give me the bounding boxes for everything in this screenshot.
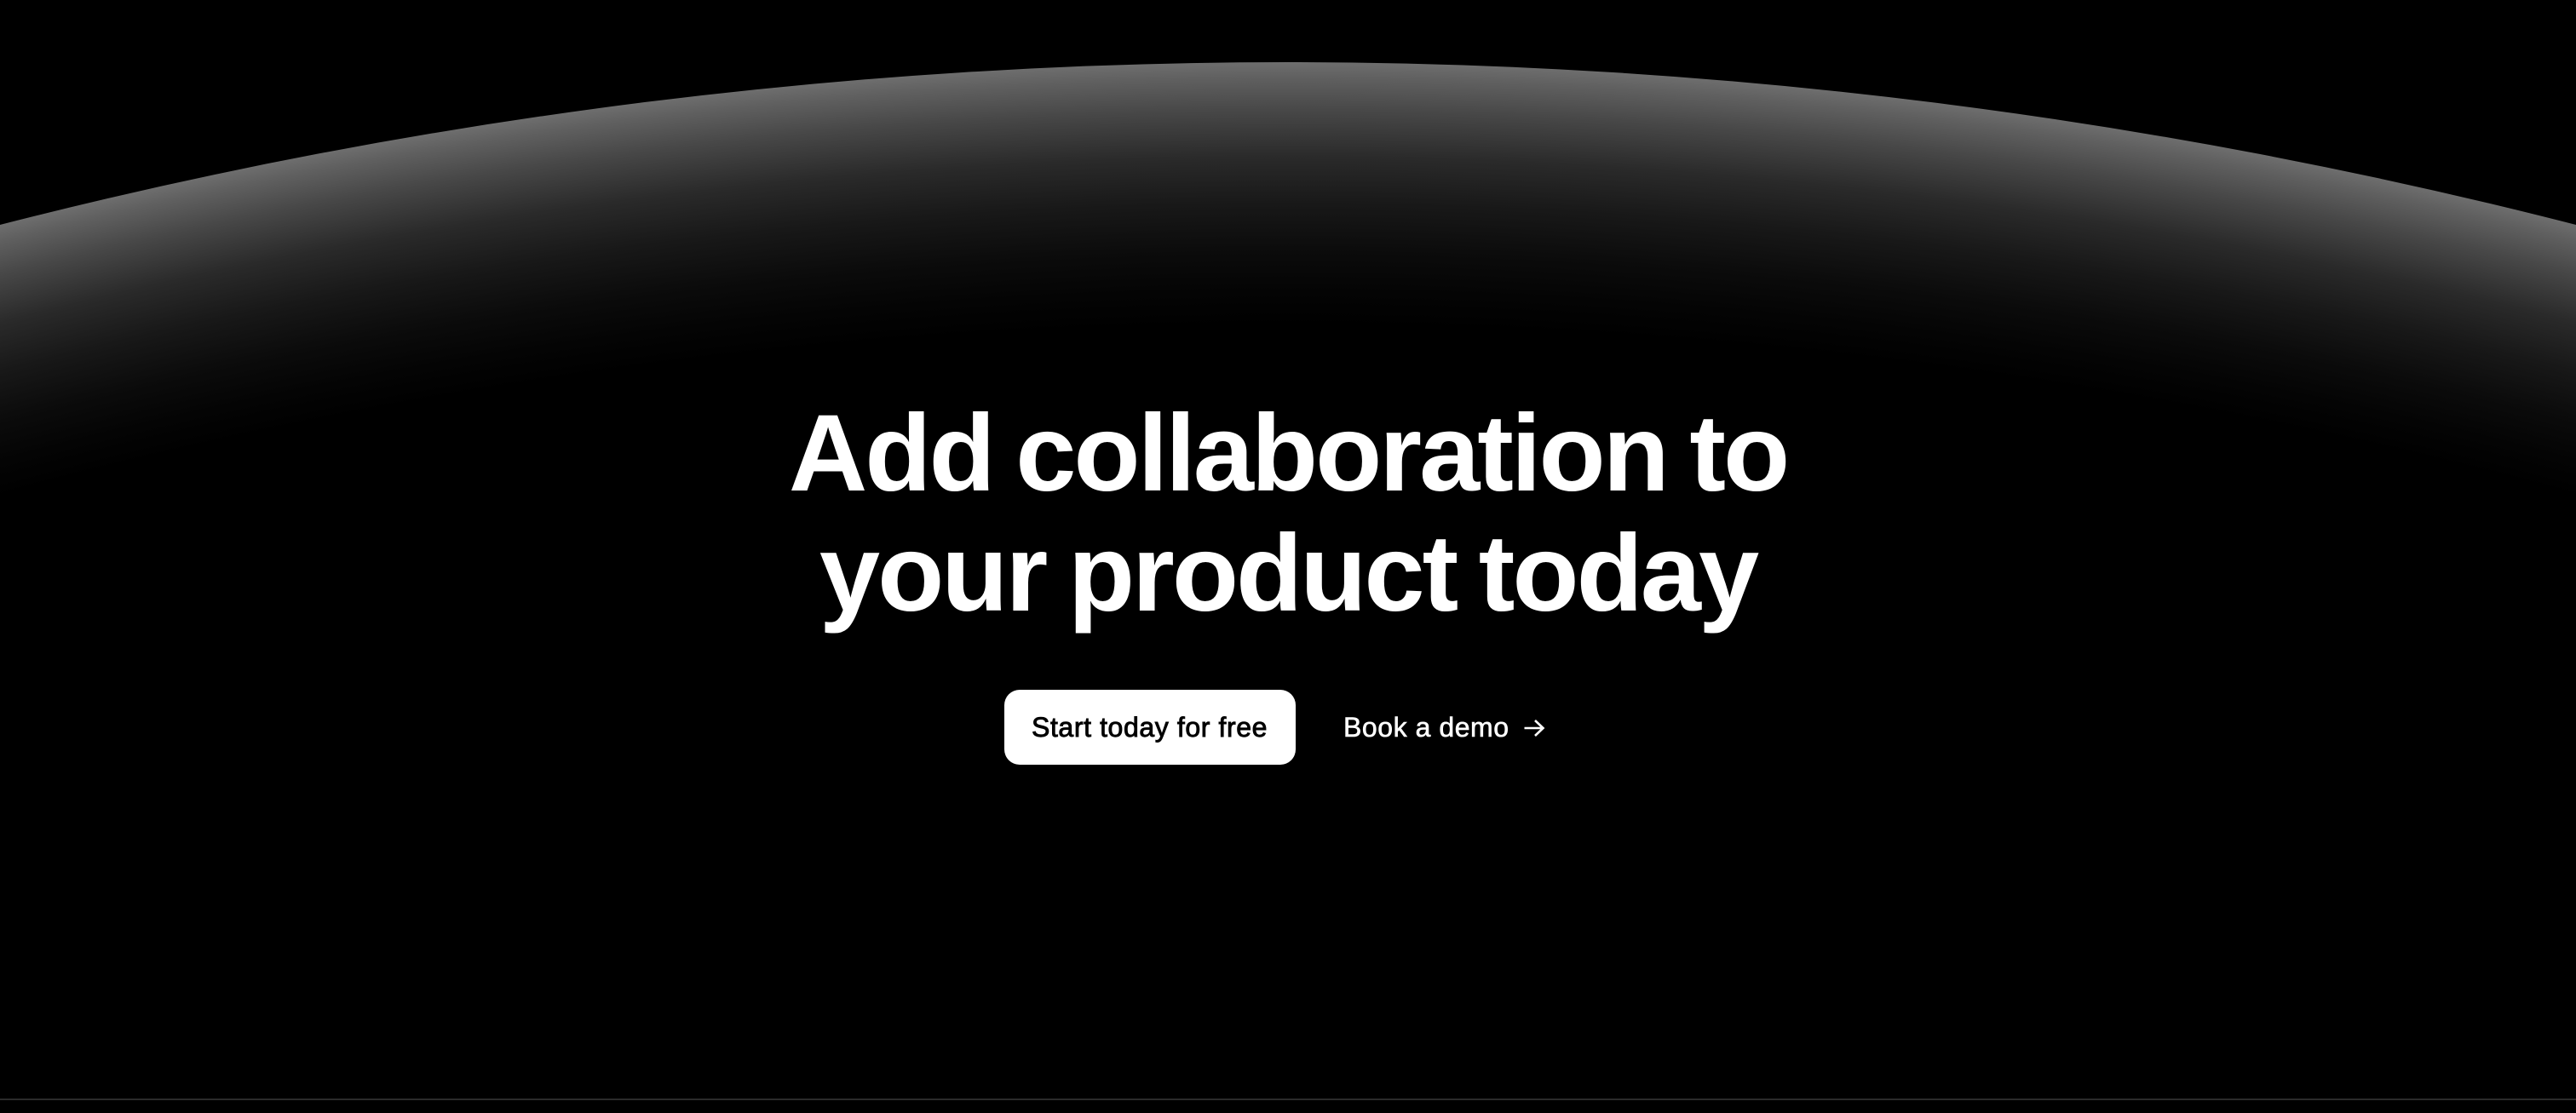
- title: Add collaboration to: [789, 393, 1787, 514]
- background glow: curved horizon: [0, 62, 2576, 438]
- icon: arrow: [1525, 720, 1545, 737]
- button: start today for free: Start today for free: [1032, 712, 1268, 743]
- button: start today for free: [1004, 690, 1296, 765]
- link: book a demo with arrow: Book a demo: [1343, 712, 1509, 743]
- title: [789, 393, 1787, 634]
- title: your product today: [819, 513, 1757, 634]
- footer divider line: [0, 1099, 2576, 1100]
